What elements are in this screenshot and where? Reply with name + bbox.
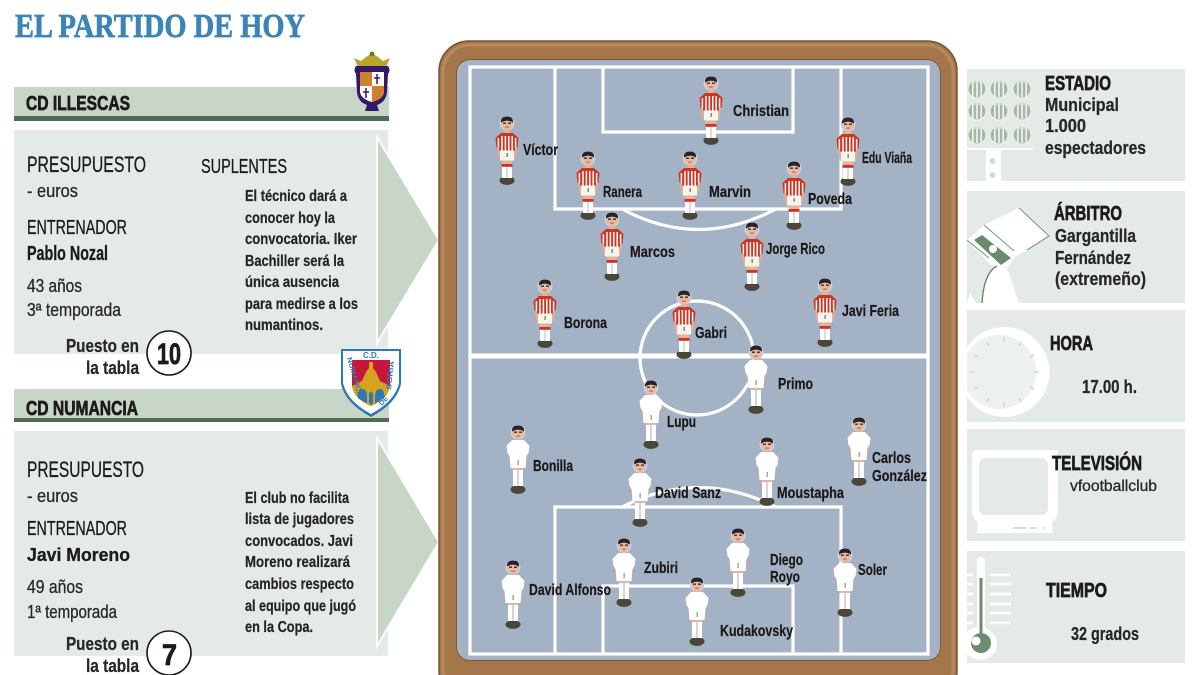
player: David Sanz: [628, 458, 721, 527]
icon: Numancia crest: NUMANCIA: [345, 357, 364, 400]
squad note: Moreno realizará: [245, 554, 350, 571]
title: EL PARTIDO DE HOY: [15, 8, 305, 45]
player: Edu Viaña: [836, 117, 912, 186]
budget: - euros: [27, 181, 78, 201]
league position: 7: Puesto en: [66, 634, 139, 654]
player: Lupu: [640, 380, 696, 449]
kick-off text: 17.00 h.: [1082, 377, 1137, 397]
player: Christian: [700, 76, 789, 145]
kick-off text: [1050, 333, 1137, 397]
substitutes note: conocer hoy la: [245, 210, 335, 227]
player: Moustapha: [756, 437, 844, 506]
player: Marvin: [678, 151, 751, 220]
player: David Alfonso: [502, 560, 611, 629]
referee text: Fernández: [1055, 248, 1131, 268]
coach: Pablo Nozal: [27, 243, 108, 265]
coach: Javi Moreno: [27, 545, 130, 565]
info box: CD Numancia: [14, 431, 388, 656]
player: Jorge Rico: [740, 222, 825, 291]
budget: PRESUPUESTO: [27, 152, 146, 177]
league position: 10: [66, 331, 191, 378]
budget: [27, 457, 144, 506]
player: Diego Royo: Royo: [770, 569, 800, 586]
weather text: [1046, 580, 1139, 644]
weather text: 32 grados: [1071, 624, 1139, 644]
television text: [1052, 451, 1157, 495]
budget: PRESUPUESTO: [27, 457, 144, 482]
arrow: CD Illescas to pitch: [377, 137, 439, 343]
substitutes note: SUPLENTES: [201, 156, 287, 178]
icon: television set: [972, 450, 1058, 533]
player: Víctor: Víctor: [523, 142, 558, 159]
stadium text: [1045, 73, 1146, 158]
weather text: TIEMPO: [1046, 580, 1107, 602]
substitutes note: El técnico dará a: [245, 188, 347, 205]
info box: CD Illescas: [14, 130, 388, 354]
budget: - euros: [27, 486, 78, 506]
header bar: CD Illescas: CD ILLESCAS: [26, 93, 130, 115]
stadium text: Municipal: [1045, 95, 1119, 115]
stadium text: espectadores: [1045, 138, 1146, 158]
wooden frame: [439, 41, 957, 675]
substitutes note: única ausencia: [245, 274, 339, 291]
panel: television: [967, 429, 1185, 541]
icon: Numancia crest: C.D.: [363, 351, 379, 360]
panel: CD Numancia: [14, 349, 439, 675]
player: Zubiri: [612, 538, 678, 607]
player: Javi Feria: Javi Feria: [842, 303, 899, 320]
panel: kick-off time: [967, 310, 1185, 422]
icon: clock: [967, 327, 1049, 417]
player: David Sanz: David Sanz: [655, 485, 721, 502]
player: Carlos González: Carlos: [872, 450, 911, 467]
substitutes note: Bachiller será la: [245, 253, 344, 270]
player: Marcos: [600, 212, 675, 281]
player: Víctor: [496, 116, 558, 185]
player: Gabri: [672, 290, 727, 359]
league position: 10: 10: [157, 338, 181, 371]
substitutes note: [201, 156, 358, 334]
panel: CD Illescas: [14, 52, 439, 378]
header bar: CD Numancia: [14, 389, 389, 422]
player: Lupu: Lupu: [667, 414, 696, 431]
coach: ENTRENADOR: [27, 518, 127, 540]
player: Ranera: Ranera: [603, 184, 642, 201]
player: Carlos González: González: [872, 468, 927, 485]
television text: vfootballclub: [1070, 478, 1157, 495]
player: Primo: Primo: [778, 376, 813, 393]
arrow: CD Numancia to pitch: [377, 438, 439, 646]
player: Marcos: Marcos: [630, 244, 675, 261]
header bar: CD Numancia: CD NUMANCIA: [26, 398, 138, 420]
player: Moustapha: Moustapha: [777, 485, 844, 502]
coach: 43 años: [27, 276, 82, 296]
panel: referee: [967, 191, 1185, 303]
player: Poveda: [782, 161, 852, 230]
icon: thermometer: [965, 557, 1011, 660]
player: Kudakovsky: Kudakovsky: [720, 623, 793, 640]
player: Edu Viaña: Edu Viaña: [862, 150, 912, 167]
league position: 7: [66, 631, 191, 675]
player: Carlos González: [848, 417, 927, 486]
league position: 10: Puesto en: [66, 336, 139, 356]
coach: 49 años: [27, 577, 83, 597]
player: Marvin: Marvin: [709, 184, 751, 201]
referee text: [1054, 202, 1146, 289]
icon: Numancia crest: SORIA: [386, 361, 396, 390]
player: Diego Royo: Diego: [770, 552, 803, 569]
playing field: [457, 60, 940, 660]
league position: 10: la tabla: [86, 358, 140, 378]
coach: [27, 217, 127, 320]
player: Primo: [744, 345, 813, 414]
stadium text: ESTADIO: [1045, 73, 1111, 95]
budget: [27, 152, 146, 201]
player: Bonilla: Bonilla: [533, 458, 573, 475]
player: Zubiri: Zubiri: [644, 560, 678, 577]
coach: 3ª temporada: [27, 300, 122, 320]
player: Diego Royo: [726, 528, 803, 597]
panel: weather: [965, 551, 1185, 663]
pitch board: [439, 41, 957, 675]
player: Jorge Rico: Jorge Rico: [766, 241, 825, 258]
player: Soler: Soler: [858, 562, 887, 579]
icon: Numancia crest: [341, 349, 401, 417]
player: Javi Feria: [814, 278, 899, 347]
player: Kudakovsky: [686, 577, 793, 646]
icon: floodlight: [967, 80, 1033, 181]
icon: Numancia crest: DE: [378, 395, 390, 407]
referee text: Gargantilla: [1055, 226, 1137, 246]
coach: 1ª temporada: [27, 602, 118, 622]
coach: [27, 518, 130, 622]
header bar: CD Illescas: [14, 87, 389, 121]
substitutes note: numantinos.: [245, 317, 323, 334]
referee text: ÁRBITRO: [1054, 202, 1122, 225]
player: Christian: Christian: [733, 103, 789, 120]
player: Borona: Borona: [564, 315, 607, 332]
league position: 7: 7: [162, 639, 177, 672]
squad note: El club no facilita: [245, 490, 349, 507]
squad note: cambios respecto: [245, 576, 354, 593]
player: David Alfonso: David Alfonso: [529, 582, 611, 599]
squad note: lista de jugadores: [245, 511, 354, 528]
stadium text: 1.000: [1045, 116, 1086, 136]
squad note: convocados. Javi: [245, 533, 353, 550]
icon: Illescas crest: [354, 52, 390, 111]
referee text: (extremeño): [1055, 269, 1146, 289]
substitutes note: convocatoria. Iker: [245, 231, 357, 248]
squad note: [245, 490, 356, 636]
kick-off text: HORA: [1050, 333, 1093, 355]
panel: stadium: [967, 69, 1185, 181]
squad note: al equipo que jugó: [245, 598, 356, 615]
player: Soler: [834, 548, 887, 617]
icon: whistle: [967, 208, 1049, 303]
player: Ranera: [576, 151, 642, 220]
squad note: en la Copa.: [245, 619, 313, 636]
coach: ENTRENADOR: [27, 217, 127, 239]
television text: TELEVISIÓN: [1052, 451, 1142, 475]
player: Gabri: Gabri: [695, 325, 727, 342]
player: Borona: [534, 279, 607, 348]
player: Poveda: Poveda: [808, 191, 852, 208]
player: Bonilla: [506, 425, 573, 494]
substitutes note: para medirse a los: [245, 296, 358, 313]
